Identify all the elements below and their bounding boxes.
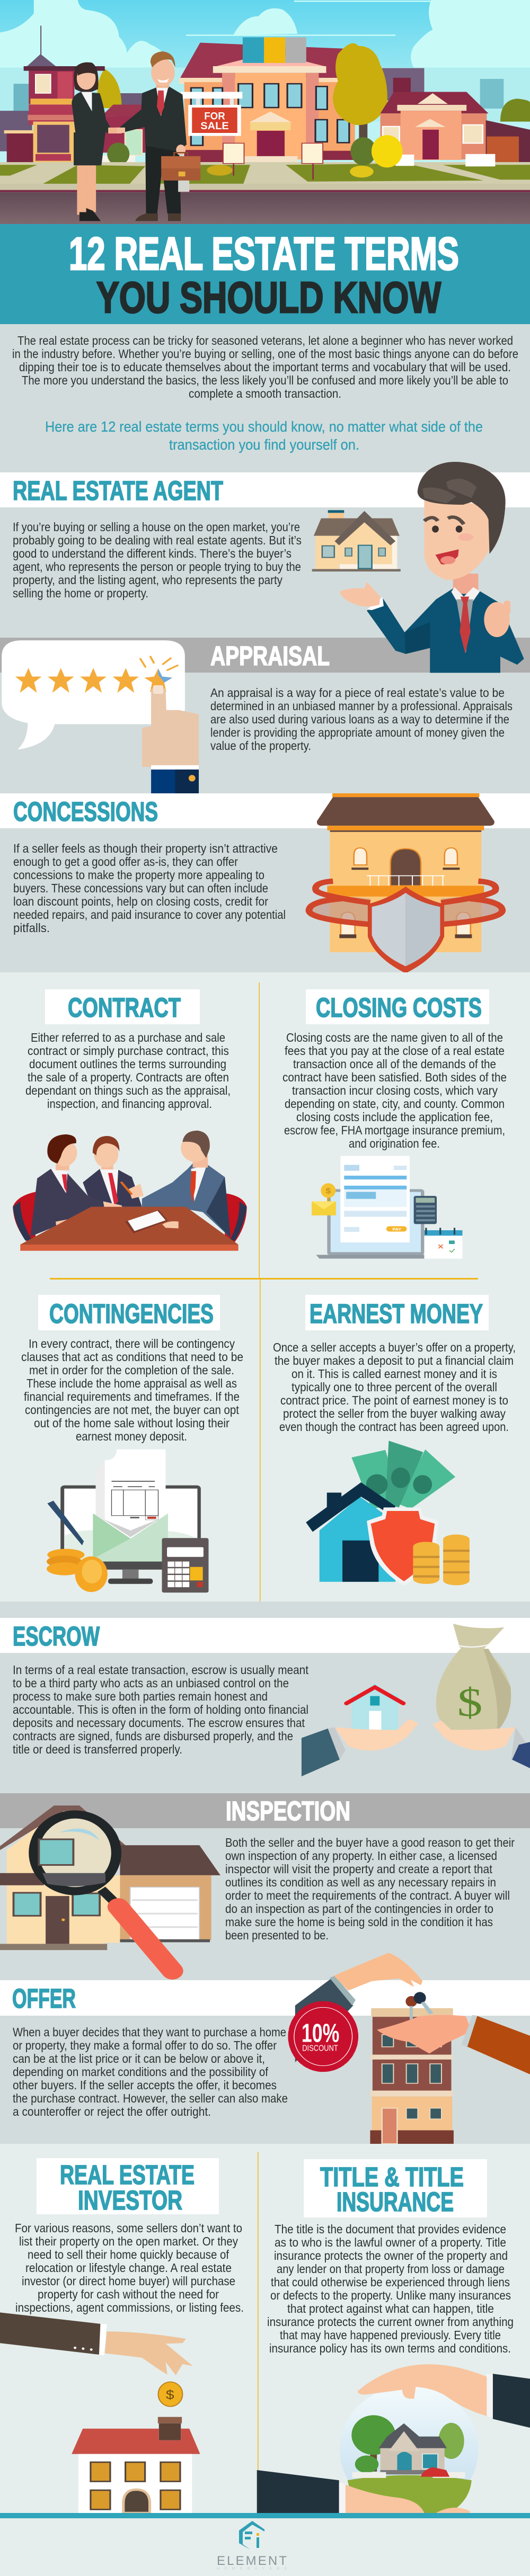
receiving hand: [377, 2015, 530, 2074]
text: escrow: accountable. This is often in the form of holding onto financial: [13, 1703, 308, 1716]
text: closing costs: depending on state, city, and county. Common: [285, 1097, 505, 1111]
text: real estate investor: inspections, agent commissions, or listing fees.: [15, 2301, 244, 2314]
icon: house protected by shield: [308, 793, 503, 973]
agent figure: [340, 462, 524, 673]
text: real estate investor: list their property on the open market. Or they: [19, 2234, 238, 2248]
text: contract: inspection, and financing approval.: [47, 1097, 212, 1111]
intro callout: [45, 418, 483, 453]
man at left: [30, 1134, 103, 1237]
text: closing costs: closing costs include the application fee,: [296, 1110, 493, 1124]
text: real estate agent: [13, 520, 302, 600]
icon: laptop with invoice, calculator and calendar: [312, 1156, 463, 1259]
discount badge: [290, 2003, 356, 2070]
text: contract: the sale of a property. Contracts are often: [28, 1070, 229, 1084]
text: offer: the purchase contract. However, the seller can also make: [13, 2091, 288, 2105]
intro callout: Here are 12 real estate terms you should know, no matter what side of the: [45, 418, 483, 435]
main house: [179, 43, 358, 164]
column divider: [258, 2152, 259, 2470]
text: concessions: buyers. These concessions vary but can often include: [13, 881, 268, 895]
panel: inspection band: [0, 1793, 530, 1828]
text: real estate agent: good to understand the different kinds. There’s the buyer’s: [13, 547, 292, 560]
icon: real estate agent man with house: [312, 462, 524, 673]
text: offer: or property, they make a formal offer to do so. The offer: [13, 2038, 277, 2052]
text: concessions: pitfalls.: [13, 921, 50, 935]
heading box: title and title insurance: TITLE & TITLE: [320, 2162, 464, 2192]
text: offer: other buyers. If the seller accepts the offer, it becomes: [13, 2078, 277, 2092]
text: inspection: been presented to be.: [225, 1928, 329, 1942]
text: closing costs: contract have been satisfied. Both sides of the: [282, 1070, 507, 1084]
heading box: real estate investor: REAL ESTATE: [60, 2160, 195, 2190]
panel: escrow: [0, 1618, 530, 1653]
icon: small house: [312, 510, 401, 571]
text: contingencies: earnest money deposit.: [76, 1429, 187, 1443]
text: earnest money: contract price. The point of earnest money is to: [280, 1393, 508, 1407]
icon: hands protecting house in a globe: [257, 2364, 530, 2514]
text: title insurance: insurance protects the owner of the property and: [274, 2249, 508, 2262]
text: closing costs: transaction incur closing costs, which vary: [292, 1084, 498, 1097]
icon: hands exchanging house and money bag: [302, 1624, 530, 1776]
for sale sign: SALE: [200, 120, 229, 131]
small house: [347, 1683, 403, 1730]
front lawns, paths and street: [0, 135, 530, 224]
logo: element home buyers: HOMEBUYERS: [217, 2567, 287, 2571]
panel: concessions: [0, 793, 530, 828]
text: contingencies: clauses that act as conditions that need to be: [21, 1350, 243, 1364]
heading box: contingencies: [38, 1295, 220, 1330]
heading: inspection: INSPECTION: [226, 1796, 350, 1826]
icon: laptop with invoice, calculator and calendar: PAY: [392, 1227, 402, 1231]
text: title insurance: as to who is the lawful owner of a property. Title: [275, 2235, 506, 2249]
text: concessions: If a seller feels as though their property isn’t attractive: [13, 842, 278, 855]
icon: monitor with envelope, invoice, pen, coins and calculator: [47, 1450, 209, 1593]
text: inspection: do an inspection as part of the contingencies in order to: [225, 1902, 493, 1916]
heading box: real estate investor: INVESTOR: [78, 2185, 182, 2215]
text: contingencies: out of the home sale without losing their: [34, 1416, 229, 1430]
text: title insurance: that protect against what can happen, title: [287, 2302, 494, 2315]
text: contract: contract or simply purchase contract, this: [28, 1044, 229, 1058]
for sale sign: FOR: [204, 110, 225, 122]
text: inspection: inspector will visit the property and create a report that: [225, 1862, 493, 1876]
text: closing costs: fees that you pay at the close of a real estate: [285, 1044, 505, 1058]
magnifying glass: [34, 1814, 172, 1971]
text: closing costs: [282, 1031, 507, 1150]
text: escrow: In terms of a real estate transaction, escrow is usually meant: [13, 1663, 309, 1677]
text: offer: can be at the list price or it can be below or above it,: [13, 2052, 265, 2065]
heading box: contingencies: CONTINGENCIES: [49, 1299, 214, 1329]
text: real estate agent: If you’re buying or selling a house on the open market, you’re: [13, 520, 300, 534]
text: appraisal: [210, 686, 513, 753]
text: contract: document outlines the terms surrounding: [29, 1057, 226, 1071]
icon: hand dropping coin into house: [0, 2312, 200, 2513]
text: appraisal: An appraisal is a way for a piece of real estate’s value to be: [210, 686, 505, 700]
text: contingencies: financial requirements and timeframes. If the: [24, 1390, 240, 1403]
text: title insurance: The title is the document that provides evidence: [275, 2222, 506, 2236]
text: concessions: [13, 842, 286, 935]
heading: concessions: CONCESSIONS: [13, 797, 158, 827]
text: concessions: enough to get a good offer as-is, they can offer: [13, 855, 238, 869]
column divider: [50, 982, 478, 1602]
panel: offer: [0, 1980, 530, 2016]
meeting table: [20, 1207, 238, 1251]
text: offer: When a buyer decides that they want to purchase a home: [13, 2025, 286, 2039]
text: concessions: loan discount points, help on closing costs, credit for: [13, 895, 268, 908]
star rating: [15, 657, 178, 693]
icon: house with cash, shield and coins: [306, 1441, 470, 1586]
text: real estate investor: [15, 2221, 244, 2314]
main title: [69, 228, 459, 322]
left townhouse: [4, 25, 105, 164]
buyer hand: [432, 1720, 530, 1768]
text: concessions: needed repairs, and paid insurance to cover any potential: [13, 908, 286, 922]
text: contingencies: These include the home appraisal as well as: [26, 1376, 237, 1390]
tall yellow tree: [333, 43, 387, 151]
text: contract: [25, 1031, 231, 1111]
heading box: earnest money: [305, 1295, 489, 1330]
intro paragraph: [12, 334, 518, 400]
text: contingencies: contingencies are not met, the buyer can opt: [25, 1403, 240, 1417]
heading box: title and title insurance: [304, 2159, 487, 2217]
text: earnest money: typically one to three percent of the overall: [292, 1380, 497, 1394]
discount badge: DISCOUNT: [302, 2043, 338, 2053]
text: title insurance: that may have happened previously. Every title: [280, 2328, 501, 2342]
hero illustration: agents shaking hands in front of houses: [0, 0, 530, 224]
heading box: real estate investor: [37, 2158, 219, 2215]
text: real estate agent: probably going to be dealing with real estate agents. But it’s: [13, 533, 302, 547]
logo colour swatches: [243, 37, 306, 63]
text: real estate agent: property, and the listing agent, who represents the party: [13, 573, 282, 587]
text: title insurance: [267, 2222, 514, 2355]
keys: [405, 1992, 434, 2019]
heading: escrow: ESCROW: [13, 1621, 100, 1651]
text: real estate investor: property for cash without the need for: [38, 2287, 219, 2301]
text: escrow: [13, 1663, 309, 1756]
heading box: title and title insurance: INSURANCE: [337, 2187, 454, 2217]
text: real estate investor: For various reasons, some sellers don’t want to: [15, 2221, 242, 2235]
seller hand: [302, 1719, 419, 1776]
text: earnest money: protect the seller from the buyer walking away: [283, 1407, 506, 1420]
text: real estate investor: need to sell their home quickly because of: [28, 2248, 229, 2261]
text: closing costs: Closing costs are the name given to all of the: [286, 1031, 503, 1044]
text: contingencies: [21, 1337, 243, 1443]
text: closing costs: and origination fee.: [349, 1137, 440, 1150]
icon: keys handed over above building with discount badge: [290, 1953, 530, 2144]
text: real estate investor: investor (or direct home buyer) will purchase: [22, 2274, 235, 2288]
title band: [0, 224, 530, 324]
right house: [381, 78, 530, 162]
icon: hand dropping coin into house: $: [166, 2387, 174, 2402]
text: offer: [13, 2025, 288, 2118]
heading box: contract: [45, 989, 200, 1024]
text: escrow: deposits and necessary documents. The escrow ensures that: [13, 1716, 305, 1730]
text: real estate investor: relocation or lifestyle change. A real estate: [25, 2261, 232, 2275]
logo: element home buyers: [217, 2521, 287, 2571]
heading box: closing costs: [306, 989, 489, 1024]
panel: real estate agent: [0, 472, 530, 507]
house behind agents: [100, 104, 145, 165]
discount badge: 10%: [302, 2018, 339, 2047]
text: escrow: process to make sure both parties remain honest and: [13, 1689, 268, 1703]
footer teal strip: [0, 2513, 530, 2518]
intro paragraph: complete a smooth transaction.: [189, 387, 341, 400]
money bag: [436, 1624, 511, 1731]
text: contingencies: met in order for the completion of the sale.: [29, 1363, 234, 1377]
logo: element home buyers: ELEMENT: [217, 2554, 287, 2568]
panel: two column section background: [0, 972, 530, 1602]
intro callout: transaction you find yourself on.: [169, 436, 359, 453]
text: inspection: outlines its condition as well as any necessary repairs in: [225, 1875, 496, 1889]
text: contract: Either referred to as a purchase and sale: [31, 1031, 225, 1044]
panel: appraisal band: [0, 638, 530, 673]
text: contingencies: In every contract, there will be contingency: [29, 1337, 235, 1350]
text: inspection: make sure the home is being sold in the condition it has: [225, 1915, 493, 1929]
text: inspection: own inspection of any property. In either case, a licensed: [225, 1849, 497, 1863]
text: earnest money: on it. This is called earnest money and it is: [292, 1367, 497, 1381]
text: offer: a counteroffer or reject the offer outright.: [13, 2105, 211, 2118]
icon: three businessmen signing a contract: [13, 1131, 247, 1251]
icon: house under magnifying glass: [0, 1805, 220, 1971]
man in middle: [83, 1136, 142, 1211]
money bag: $: [457, 1680, 482, 1725]
man at right: [121, 1131, 231, 1238]
text: earnest money: [273, 1340, 516, 1434]
text: appraisal: value of the property.: [210, 739, 311, 753]
icon: speech bubble with five star rating: [2, 640, 199, 793]
main title: YOU SHOULD KNOW: [96, 273, 441, 322]
businesswoman: [72, 62, 122, 221]
heading box: contract: CONTRACT: [68, 992, 181, 1023]
panel: bottom two column section background: [0, 2144, 530, 2576]
text: escrow: to be a third party who acts as an unbiased control on the: [13, 1676, 289, 1690]
icon: laptop with invoice, calculator and calendar: $: [325, 1187, 331, 1195]
businessman with briefcase: [117, 51, 200, 221]
building: [370, 2008, 454, 2144]
giving hand: [295, 1953, 422, 2062]
text: escrow: contracts are signed, funds are disbursed properly, and the: [13, 1729, 293, 1743]
text: escrow: title or deed is transferred properly.: [13, 1742, 182, 1756]
for sale sign: [181, 92, 242, 136]
text: contract: dependant on things such as the appraisal,: [25, 1084, 231, 1097]
pointing hand: [142, 685, 199, 793]
text: concessions: concessions to make the property more appealing to: [13, 868, 264, 882]
heading: real estate agent: REAL ESTATE AGENT: [13, 476, 223, 506]
text: inspection: [225, 1836, 515, 1942]
heading: appraisal: APPRAISAL: [210, 641, 330, 671]
text: title insurance: any lender on that property from loss or damage: [277, 2262, 505, 2276]
heading: offer: OFFER: [12, 1983, 76, 2014]
text: offer: depending on market conditions and the possibility of: [13, 2065, 269, 2079]
text: real estate agent: agent, who represents the person or people trying to buy the: [13, 560, 301, 574]
text: real estate agent: selling the home or property.: [13, 586, 148, 600]
yard signs: [223, 143, 323, 180]
text: closing costs: transaction once all of the demands of the: [293, 1057, 496, 1071]
